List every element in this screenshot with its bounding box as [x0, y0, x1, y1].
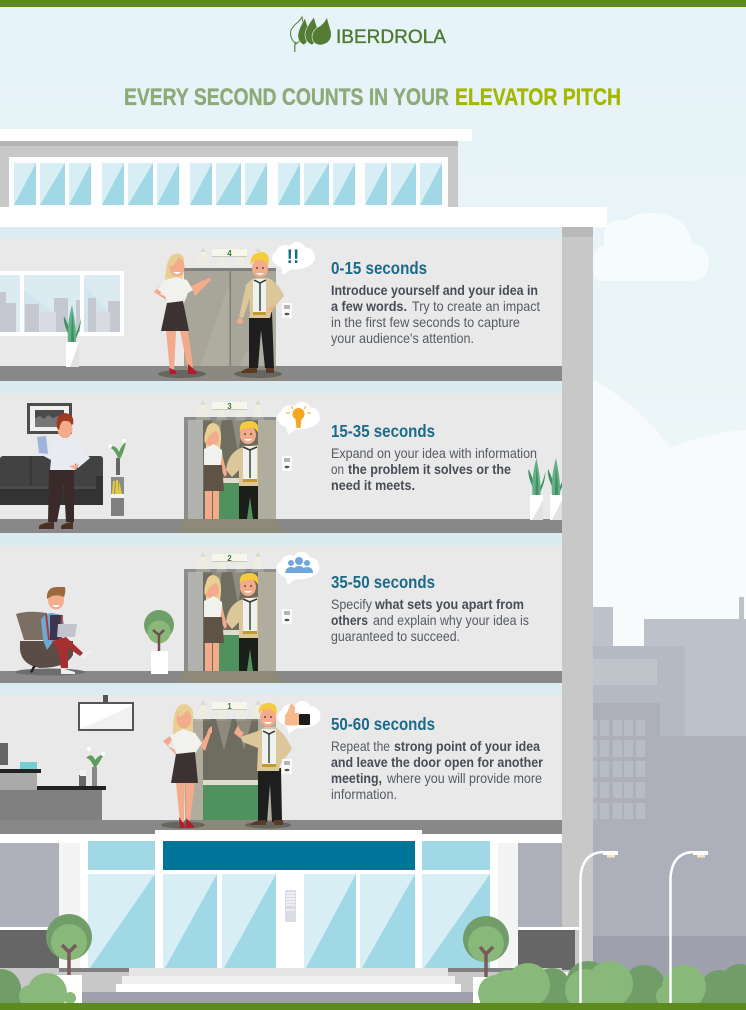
text: 50-60 seconds: information.: [331, 786, 397, 802]
glass panes: [88, 874, 490, 968]
panel: floor 2: [0, 533, 562, 685]
logo wordmark: IBERDROLA: [336, 27, 446, 48]
text: 15-35 seconds: need it meets.: [331, 477, 415, 493]
man in armchair with laptop: [15, 587, 92, 676]
elevator open, ground: [177, 700, 283, 834]
text: 0-15 seconds: your audience's attention.: [331, 330, 474, 346]
text: 0-15 seconds: [331, 258, 540, 346]
title: EVERY SECOND COUNTS IN YOUR: [124, 84, 449, 111]
top band: [0, 0, 746, 7]
reception desk: [0, 743, 106, 820]
door intercom: [285, 890, 296, 922]
text: 50-60 seconds: 50-60 seconds: [331, 714, 435, 734]
left potted tree: [46, 914, 92, 1003]
text: 35-50 seconds: guaranteed to succeed.: [331, 628, 460, 644]
panel: floor 3: [0, 381, 565, 533]
speech bubble: exclamation: !!: [287, 247, 299, 268]
text: 0-15 seconds: Try to create an impact: [412, 298, 540, 314]
title: ELEVATOR PITCH: [455, 84, 621, 111]
speech bubble: light bulb: [277, 402, 320, 435]
elevator open, ground: 1: [227, 702, 232, 711]
text: 50-60 seconds: strong point of your idea: [394, 738, 540, 754]
side column: [562, 227, 593, 972]
text: 50-60 seconds: where you will provide more: [386, 770, 542, 786]
speech bubble: people: [276, 552, 320, 585]
elevator closed: 4: [227, 249, 232, 258]
elevator open, floor 2: 2: [227, 554, 232, 563]
text: 35-50 seconds: what sets you apart from: [374, 596, 524, 612]
text: 0-15 seconds: in the first few seconds to capture: [331, 314, 520, 330]
elevator open, floor 3: 3: [227, 402, 232, 411]
text: 15-35 seconds: 15-35 seconds: [331, 421, 435, 441]
text: 0-15 seconds: Introduce yourself and your idea in: [331, 282, 538, 298]
building top storey: [0, 129, 607, 227]
logo leaves: [291, 17, 331, 52]
text: 0-15 seconds: 0-15 seconds: [331, 258, 427, 278]
right potted tree: [463, 916, 509, 1003]
street lamp left: [580, 851, 618, 1003]
text: 35-50 seconds: 35-50 seconds: [331, 572, 435, 592]
man with tablet: [37, 413, 90, 529]
text: 50-60 seconds: and leave the door open for another: [331, 754, 543, 770]
call button: [282, 759, 292, 774]
speech bubble: thumbs up: [278, 701, 320, 734]
elevator closed: [177, 247, 283, 381]
right bushes: [478, 961, 746, 1010]
panel: floor 1: [0, 683, 562, 834]
vase and shelf: [108, 439, 126, 516]
wall screen: [78, 695, 134, 731]
woman thumbs up: [161, 704, 212, 828]
building entrance: [0, 830, 580, 970]
panel: floor 4: [0, 227, 562, 381]
text: 35-50 seconds: others: [331, 612, 368, 628]
speech bubble: exclamation: [272, 242, 315, 275]
street lamp right: [670, 851, 708, 1003]
framed picture: [27, 403, 72, 434]
text: 35-50 seconds: Specify: [331, 596, 372, 612]
text: 35-50 seconds: [331, 572, 529, 644]
text: 35-50 seconds: and explain why your idea is: [373, 612, 529, 628]
potted plants right: [528, 458, 565, 520]
Iberdrola logo: [291, 17, 446, 52]
sofa: [0, 456, 103, 505]
call button: [282, 609, 292, 624]
text: 15-35 seconds: Expand on your idea with information: [331, 445, 537, 461]
call button: [282, 456, 292, 471]
window with skyline: [0, 271, 124, 336]
text: 15-35 seconds: the problem it solves or the: [348, 461, 511, 477]
text: 50-60 seconds: meeting,: [331, 770, 382, 786]
canopy and sign: [155, 830, 422, 844]
text: 0-15 seconds: a few words.: [331, 298, 407, 314]
man thumbs up: [234, 703, 292, 828]
woman pointing: [154, 254, 211, 378]
background cloud: [593, 213, 709, 281]
text: 15-35 seconds: on: [331, 461, 344, 477]
potted tree: [144, 610, 174, 674]
text: 50-60 seconds: Repeat the: [331, 738, 390, 754]
call button: [282, 303, 292, 318]
elevator open, floor 3: [177, 400, 283, 533]
text: 15-35 seconds: [331, 421, 537, 493]
elevator open, floor 2: [177, 552, 283, 685]
man standing: [234, 252, 284, 378]
entrance steps and pavement: [0, 968, 746, 1003]
background city skyline: [593, 597, 746, 1003]
left bushes: [0, 969, 76, 1010]
potted plant: [64, 305, 81, 367]
bottom band: [0, 1003, 746, 1010]
text: 50-60 seconds: [331, 714, 543, 802]
